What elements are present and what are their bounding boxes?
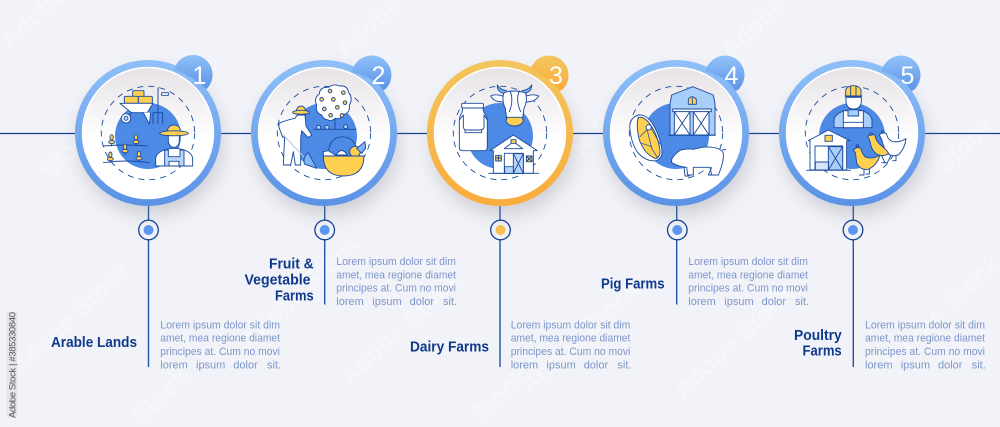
description 4: lorem xyxy=(688,296,716,308)
watermarks: Adobe Stock xyxy=(235,230,366,354)
badge number 5 xyxy=(881,57,919,90)
description 3: Lorem ipsum dolor sit dim xyxy=(511,319,630,331)
badge number 3: 3 xyxy=(549,62,563,90)
description 4: Lorem ipsum dolor sit dim xyxy=(688,256,808,268)
description 1: sit. xyxy=(267,359,281,371)
description 3: sit. xyxy=(617,359,631,371)
connector and node 3 xyxy=(491,200,510,367)
description 1: lorem xyxy=(160,359,188,371)
description 1: dolor xyxy=(233,359,258,371)
watermarks: Adobe Stock xyxy=(5,257,136,381)
description 4: sit. xyxy=(795,296,809,308)
heading: Fruit and Vegetable Farms: Farms xyxy=(275,287,314,304)
description 5: lorem xyxy=(865,359,893,371)
description 1: principes at. Cum no movi xyxy=(160,346,280,358)
description 4: principes at. Cum no movi xyxy=(688,283,808,295)
badge number 3 xyxy=(530,56,568,90)
medallion 5 xyxy=(779,56,926,214)
connector and node 4 xyxy=(668,200,687,304)
heading: Arable Lands: Arable Lands xyxy=(51,334,137,351)
medallion 2 xyxy=(251,56,398,214)
medallion 3 xyxy=(427,56,574,214)
icon: gardener, fruit tree and vegetable basket xyxy=(279,85,366,176)
watermarks: Adobe Stock xyxy=(335,267,466,391)
connector and node 5 xyxy=(843,200,863,367)
badge number 4 xyxy=(705,57,743,90)
description 5: principes at. Cum no movi xyxy=(865,346,985,358)
heading: Fruit and Vegetable Farms xyxy=(244,255,314,304)
description 2: ipsum xyxy=(372,296,402,308)
badge number 1 xyxy=(174,55,212,90)
description 2: amet, mea regione diamet xyxy=(336,269,456,281)
watermarks: Stock xyxy=(930,112,999,179)
icon: wheelbarrow, pitchfork, crops and farmer xyxy=(103,88,193,166)
badge number 2 xyxy=(352,56,391,90)
description 4: dolor xyxy=(762,296,786,308)
panel: Fruit and Vegetable Farms xyxy=(244,56,457,308)
watermarks: Adobe Stock xyxy=(668,280,799,404)
description 1: amet, mea regione diamet xyxy=(160,333,280,345)
description 2: Lorem ipsum dolor sit dim xyxy=(336,256,456,268)
heading: Fruit and Vegetable Farms: Fruit & xyxy=(269,255,314,272)
description 1: ipsum xyxy=(196,359,225,371)
watermarks: Stock xyxy=(35,117,104,184)
connector and node 1 xyxy=(139,200,158,367)
description 1: Lorem ipsum dolor sit dim xyxy=(160,319,280,331)
description 5: Lorem ipsum dolor sit dim xyxy=(865,319,985,331)
panel: Dairy Farms xyxy=(410,56,631,371)
watermarks: Adobe Stock xyxy=(515,275,646,399)
heading: Fruit and Vegetable Farms: Vegetable xyxy=(244,272,310,289)
description 3: lorem xyxy=(511,359,538,371)
badge number 4: 4 xyxy=(725,62,739,90)
icon: barn, steak and pig xyxy=(630,87,726,176)
panel: Arable Lands xyxy=(51,55,281,371)
heading: Poultry Farms: Farms xyxy=(802,343,842,360)
description 5: ipsum xyxy=(901,359,930,371)
description 3: dolor xyxy=(584,359,608,371)
description 3: principes at. Cum no movi xyxy=(511,346,630,358)
icon: milk can, cow head and barn xyxy=(459,85,539,173)
panel: Pig Farms xyxy=(601,56,809,308)
description 2: principes at. Cum no movi xyxy=(336,283,456,295)
description 5: amet, mea regione diamet xyxy=(865,333,985,345)
description 2: dolor xyxy=(410,296,434,308)
connector and node 2 xyxy=(315,200,335,304)
description 4: amet, mea regione diamet xyxy=(688,269,808,281)
heading: Dairy Farms: Dairy Farms xyxy=(410,338,489,355)
badge number 2: 2 xyxy=(372,62,385,90)
description 3: amet, mea regione diamet xyxy=(511,333,630,345)
heading: Poultry Farms xyxy=(794,327,842,360)
badge number 1: 1 xyxy=(193,62,206,90)
description 5: sit. xyxy=(972,359,986,371)
watermarks: Adobe Stock xyxy=(525,75,656,199)
description 4: ipsum xyxy=(724,296,754,308)
description 2: sit. xyxy=(443,296,457,308)
timeline: horizontal connector xyxy=(0,132,1000,134)
description 5: dolor xyxy=(938,359,963,371)
icon: poultry worker, barn and chickens xyxy=(807,86,906,175)
heading: Pig Farms: Pig Farms xyxy=(601,275,664,292)
heading: Poultry Farms: Poultry xyxy=(794,327,842,344)
medallion 1 xyxy=(75,56,222,214)
medallion 4 xyxy=(603,56,750,214)
description 2: lorem xyxy=(336,296,364,308)
description 3: ipsum xyxy=(546,359,576,371)
panel: Poultry Farms xyxy=(779,56,986,371)
stock image credit: Adobe Stock | #385330840 xyxy=(8,312,18,418)
badge number 5: 5 xyxy=(901,62,914,90)
